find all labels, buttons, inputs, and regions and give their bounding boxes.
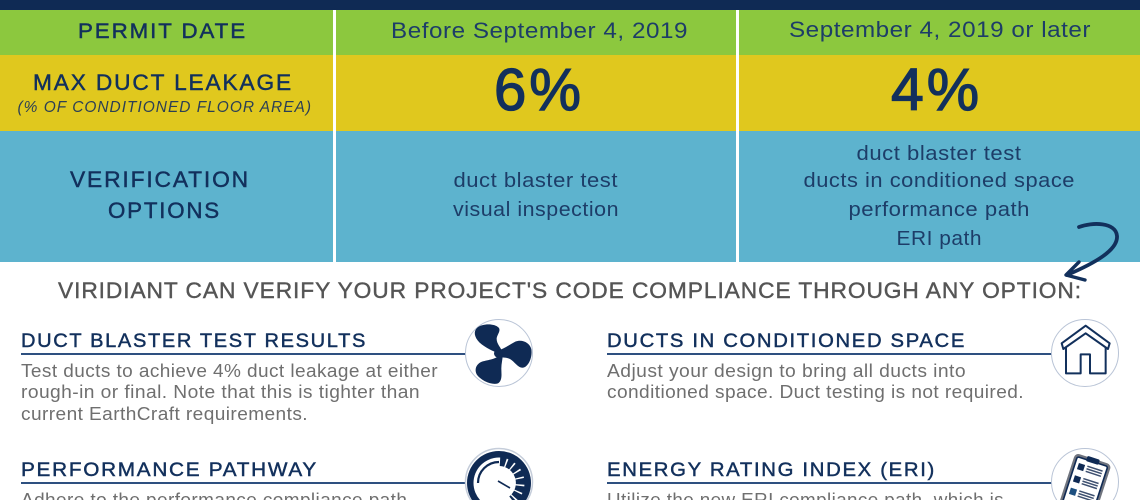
row: verification options: visual inspection	[453, 198, 619, 221]
icon: fan	[466, 320, 532, 386]
row: permit date: September 4, 2019 or later	[789, 17, 1091, 42]
option: ducts in conditioned space: conditioned space. Duct testing is not required.	[607, 382, 1024, 402]
option: duct blaster test results: DUCT BLASTER TEST RESULTS	[21, 330, 367, 352]
option: performance pathway: PERFORMANCE PATHWAY	[21, 459, 318, 481]
section heading: VIRIDIANT CAN VERIFY YOUR PROJECT'S CODE COMPLIANCE THROUGH ANY OPTION:	[58, 278, 1082, 303]
row: permit date	[0, 10, 1140, 55]
icon: house	[1052, 320, 1118, 386]
option: performance pathway	[21, 448, 532, 500]
option: energy rating index: ENERGY RATING INDEX (ERI)	[607, 459, 936, 481]
row: verification options: OPTIONS	[108, 198, 221, 223]
icon: gauge	[466, 448, 532, 500]
row: permit date: Before September 4, 2019	[391, 18, 688, 43]
row: permit date: PERMIT DATE	[78, 20, 247, 43]
comparison table	[0, 10, 1140, 262]
row: verification options: performance path	[848, 198, 1030, 221]
row: max duct leakage: 4%	[891, 57, 982, 123]
option: energy rating index	[607, 448, 1118, 500]
option: ducts in conditioned space: Adjust your design to bring all ducts into	[607, 361, 966, 381]
row: max duct leakage: MAX DUCT LEAKAGE	[33, 70, 293, 95]
row: verification options: VERIFICATION	[70, 167, 250, 192]
option: duct blaster test results: rough-in or final. Note that this is tighter than	[21, 382, 420, 402]
option: duct blaster test results	[21, 320, 532, 424]
row: verification options: duct blaster test	[454, 169, 618, 192]
row: max duct leakage: 6%	[494, 57, 584, 123]
top navy band	[0, 0, 1140, 10]
arrow	[1066, 224, 1117, 280]
option: ducts in conditioned space: DUCTS IN CONDITIONED SPACE	[607, 330, 966, 352]
option: duct blaster test results: current EarthCraft requirements.	[21, 404, 308, 424]
option: ducts in conditioned space	[607, 320, 1118, 402]
row: verification options	[0, 131, 1140, 262]
row: verification options: duct blaster test	[856, 142, 1022, 165]
row: verification options: ERI path	[896, 227, 982, 250]
icon: clipboard	[1052, 448, 1118, 500]
row: max duct leakage: (% OF CONDITIONED FLOOR AREA)	[18, 99, 312, 116]
row: max duct leakage	[0, 55, 1140, 131]
row: verification options: ducts in conditioned space	[804, 169, 1075, 192]
option: duct blaster test results: Test ducts to achieve 4% duct leakage at either	[21, 361, 438, 381]
